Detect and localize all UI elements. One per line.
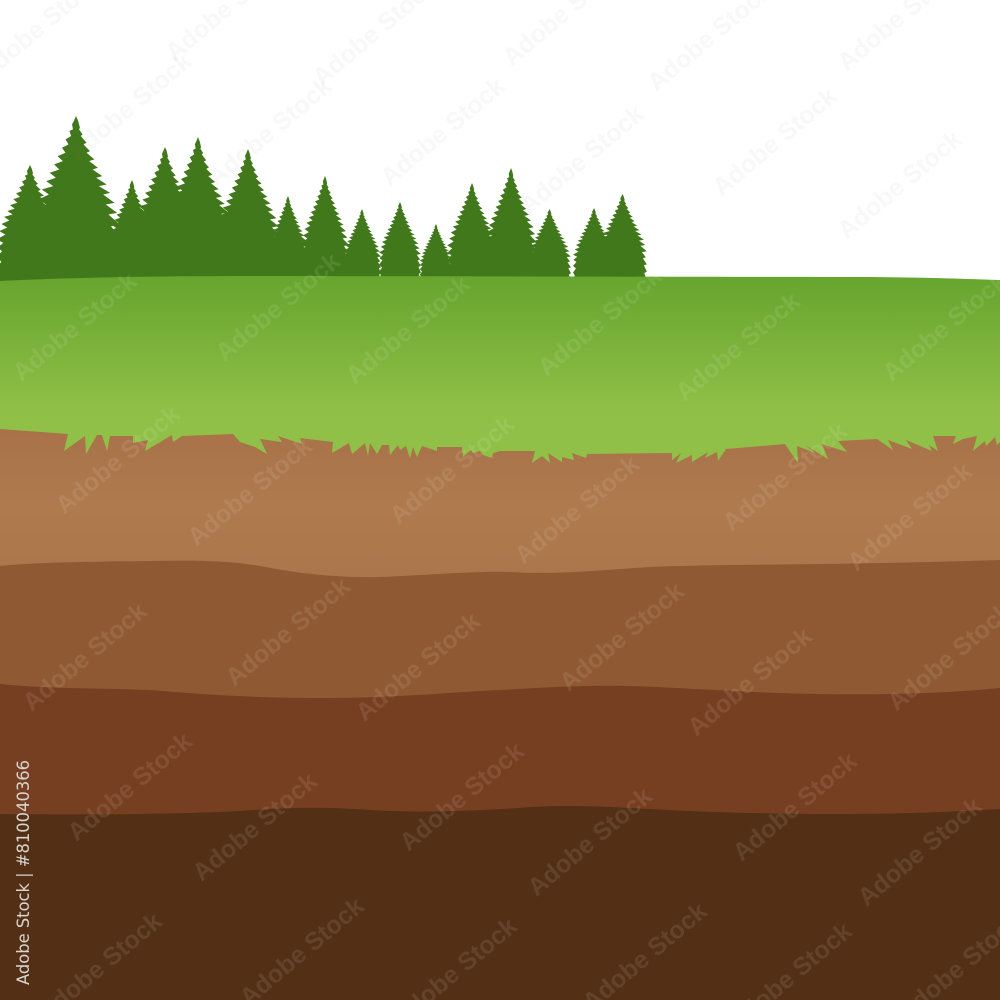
soil layer 2: mid brown: [0, 560, 1000, 700]
watermark pattern: Adobe Stock: [717, 417, 852, 537]
watermark pattern: Adobe Stock: [350, 607, 485, 727]
soil layer 1: light brown topsoil: [0, 425, 1000, 585]
tree 11: [419, 224, 453, 282]
tree 1: [0, 165, 64, 283]
tree 14: [528, 209, 571, 282]
watermark pattern: Adobe Stock: [375, 72, 510, 192]
watermark pattern: Adobe Stock: [832, 125, 967, 245]
watermark pattern: Adobe Stock: [62, 47, 197, 167]
watermark pattern: Adobe Stock: [707, 82, 842, 202]
watermark pattern: Adobe Stock: [554, 577, 689, 697]
watermark pattern: Adobe Stock: [514, 100, 649, 220]
tree 3: [106, 180, 158, 282]
watermark pattern: Adobe Stock: [17, 597, 152, 717]
watermark pattern: Adobe Stock: [842, 457, 977, 577]
watermark pattern: Adobe Stock: [340, 270, 475, 390]
tree 10: [379, 202, 421, 282]
watermark pattern: Adobe Stock: [50, 400, 185, 520]
tree 8: [301, 176, 349, 282]
tree 15: [573, 208, 615, 282]
tree 2: [31, 116, 121, 283]
tree 4: [131, 147, 199, 282]
watermark pattern: Adobe Stock: [202, 72, 337, 192]
tree 16: [598, 194, 647, 282]
watermark pattern: Adobe Stock: [210, 247, 345, 367]
watermark pattern: Adobe Stock: [384, 410, 519, 530]
watermark pattern: Adobe Stock: [682, 622, 817, 742]
watermark pattern: Adobe Stock: [522, 782, 657, 902]
tree 7: [267, 196, 309, 282]
soil layer 4: deep brown bedrock: [0, 806, 1000, 1000]
grass field with jagged lower edge: [0, 276, 1000, 463]
watermark pattern: Adobe Stock: [7, 267, 142, 387]
watermark pattern: Adobe Stock: [182, 432, 317, 552]
forest tree line: [0, 116, 647, 283]
tree 13: [485, 168, 537, 282]
soil layer 3: dark reddish brown: [0, 684, 1000, 820]
watermark pattern: Adobe Stock: [187, 767, 322, 887]
watermark pattern: Adobe Stock: [532, 262, 667, 382]
watermark pattern: Adobe Stock: [509, 450, 644, 570]
watermark pattern: Adobe Stock: [220, 572, 355, 692]
watermark pattern: Adobe Stock: [62, 727, 197, 847]
tree 12: [447, 183, 497, 282]
tree 6: [215, 149, 281, 282]
tree 9: [343, 209, 381, 282]
tree 5: [163, 137, 233, 282]
stock id vertical caption: Adobe Stock | #810040366: [14, 760, 34, 985]
watermark pattern: Adobe Stock: [394, 737, 529, 857]
watermark pattern: Adobe Stock: [727, 747, 862, 867]
watermark pattern: Adobe Stock: [670, 287, 805, 407]
watermark pattern: Adobe Stock: [852, 792, 987, 912]
